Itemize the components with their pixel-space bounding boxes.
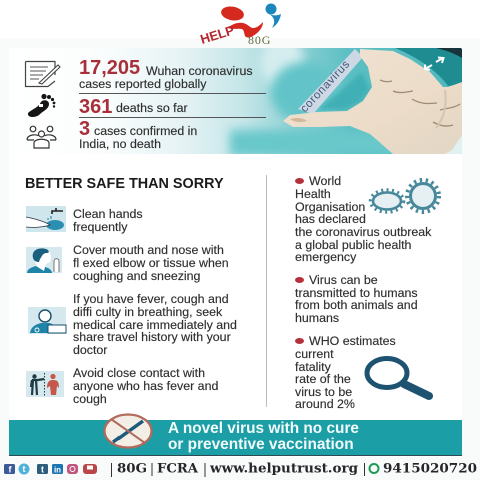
finger creases — [380, 80, 460, 126]
text: If you have fever, cough and — [73, 292, 229, 306]
text: share travel history with your — [73, 330, 231, 344]
text: around 2% — [295, 397, 355, 411]
footer: social icons: f — [8, 464, 12, 474]
panel: key statistics hero — [9, 48, 462, 154]
text: clean hands — [73, 207, 143, 234]
logo HELP text: HELP — [198, 22, 236, 47]
text: frequently — [73, 220, 127, 234]
hero photo: gloved hand holding coronavirus tube — [224, 48, 462, 154]
text: transmitted to humans — [295, 286, 418, 300]
footer: contact details: FCRA — [157, 462, 199, 476]
heading: better safe than sorry: BETTER SAFE THAN SORRY — [25, 176, 224, 192]
icon: virus particles — [368, 178, 441, 214]
text: cover mouth and nose — [73, 243, 229, 283]
statistic: 3 cases in India — [79, 118, 197, 151]
logo red figure body — [228, 22, 263, 38]
icon: keeping distance — [26, 371, 64, 397]
text: World — [309, 174, 341, 188]
icon: notepad and pencil — [24, 60, 61, 88]
text: has declared — [295, 212, 366, 226]
icon: crossed-out syringe — [103, 413, 153, 449]
text: Cover mouth and nose with — [73, 243, 224, 257]
text: fatality — [295, 360, 331, 374]
logo blue figure head — [266, 4, 276, 14]
expand arrows icon — [425, 58, 444, 70]
text: avoid close contact — [73, 366, 218, 406]
text: medical care immediately and — [73, 318, 237, 332]
footer: contact details: www.helputrust.org — [209, 462, 358, 476]
bullet: fatality rate — [295, 334, 396, 411]
text: cough — [73, 392, 107, 406]
logo: HELP 80G — [198, 4, 281, 47]
footer: social icons: in — [54, 466, 61, 474]
icon: doctor — [28, 307, 66, 334]
statistic: 361 deaths — [79, 96, 188, 118]
number 17,205: 17,205 — [79, 57, 140, 79]
footer: social icons — [4, 464, 97, 474]
text: humans — [295, 311, 339, 325]
text: Virus can be — [309, 273, 378, 287]
text: fl exed elbow or tissue when — [73, 256, 229, 270]
text: coughing and sneezing — [73, 269, 200, 283]
footer: social icons: t — [41, 464, 44, 474]
text: anyone who has fever and — [73, 379, 218, 393]
logo blue figure body — [268, 13, 281, 28]
text: the coronavirus outbreak — [295, 225, 431, 239]
text: virus to be — [295, 385, 352, 399]
text: WHO estimates — [309, 334, 396, 348]
text: Avoid close contact with — [73, 366, 205, 380]
divider line one — [79, 93, 266, 94]
footer: contact details: 9415020720 — [383, 462, 477, 476]
text: doctor — [73, 343, 107, 357]
text: fever advice — [73, 292, 237, 357]
banner text: A novel virus with no cure — [168, 420, 359, 437]
text: diffi culty in breathing, seek — [73, 305, 222, 319]
text: rate of the — [295, 372, 351, 386]
tube: coronavirus — [298, 58, 352, 115]
text: a global public health — [295, 238, 411, 252]
text cases confirmed in: cases confirmed in — [94, 124, 197, 138]
footer: contact details: 80G — [117, 462, 147, 476]
number 361: 361 — [79, 96, 112, 118]
banner text — [168, 420, 359, 453]
text: emergency — [295, 250, 356, 264]
column divider — [266, 175, 267, 407]
icon: washing hands — [26, 206, 66, 232]
footer: social icons: t — [22, 464, 26, 474]
text deaths so far: deaths so far — [116, 101, 188, 115]
icon: magnifying glass — [364, 356, 433, 400]
banner text: or preventive vaccination — [168, 436, 354, 453]
text: from both animals and — [295, 298, 418, 312]
footer: contact details — [111, 462, 477, 477]
text Wuhan coronavirus: Wuhan coronavirus — [146, 64, 253, 78]
text: current — [295, 347, 334, 361]
banner: no cure or vaccination — [9, 420, 462, 456]
divider line two — [79, 117, 266, 118]
icon: footprint — [28, 94, 56, 117]
hand — [283, 49, 462, 154]
text: Health — [295, 187, 331, 201]
logo 80G text: 80G — [248, 33, 271, 47]
text cases reported globally: cases reported globally — [79, 77, 206, 91]
number 3: 3 — [79, 118, 90, 140]
text: Organisation — [295, 200, 365, 214]
statistic: 17,205 cases — [79, 57, 253, 91]
icon: covering mouth — [26, 247, 62, 273]
bullet: WHO declaration — [295, 174, 432, 264]
logo red figure head — [220, 5, 245, 22]
icon: group of people — [26, 126, 57, 149]
text: Clean hands — [73, 207, 143, 221]
bullet: transmission — [295, 273, 418, 325]
text India, no death: India, no death — [79, 137, 161, 151]
